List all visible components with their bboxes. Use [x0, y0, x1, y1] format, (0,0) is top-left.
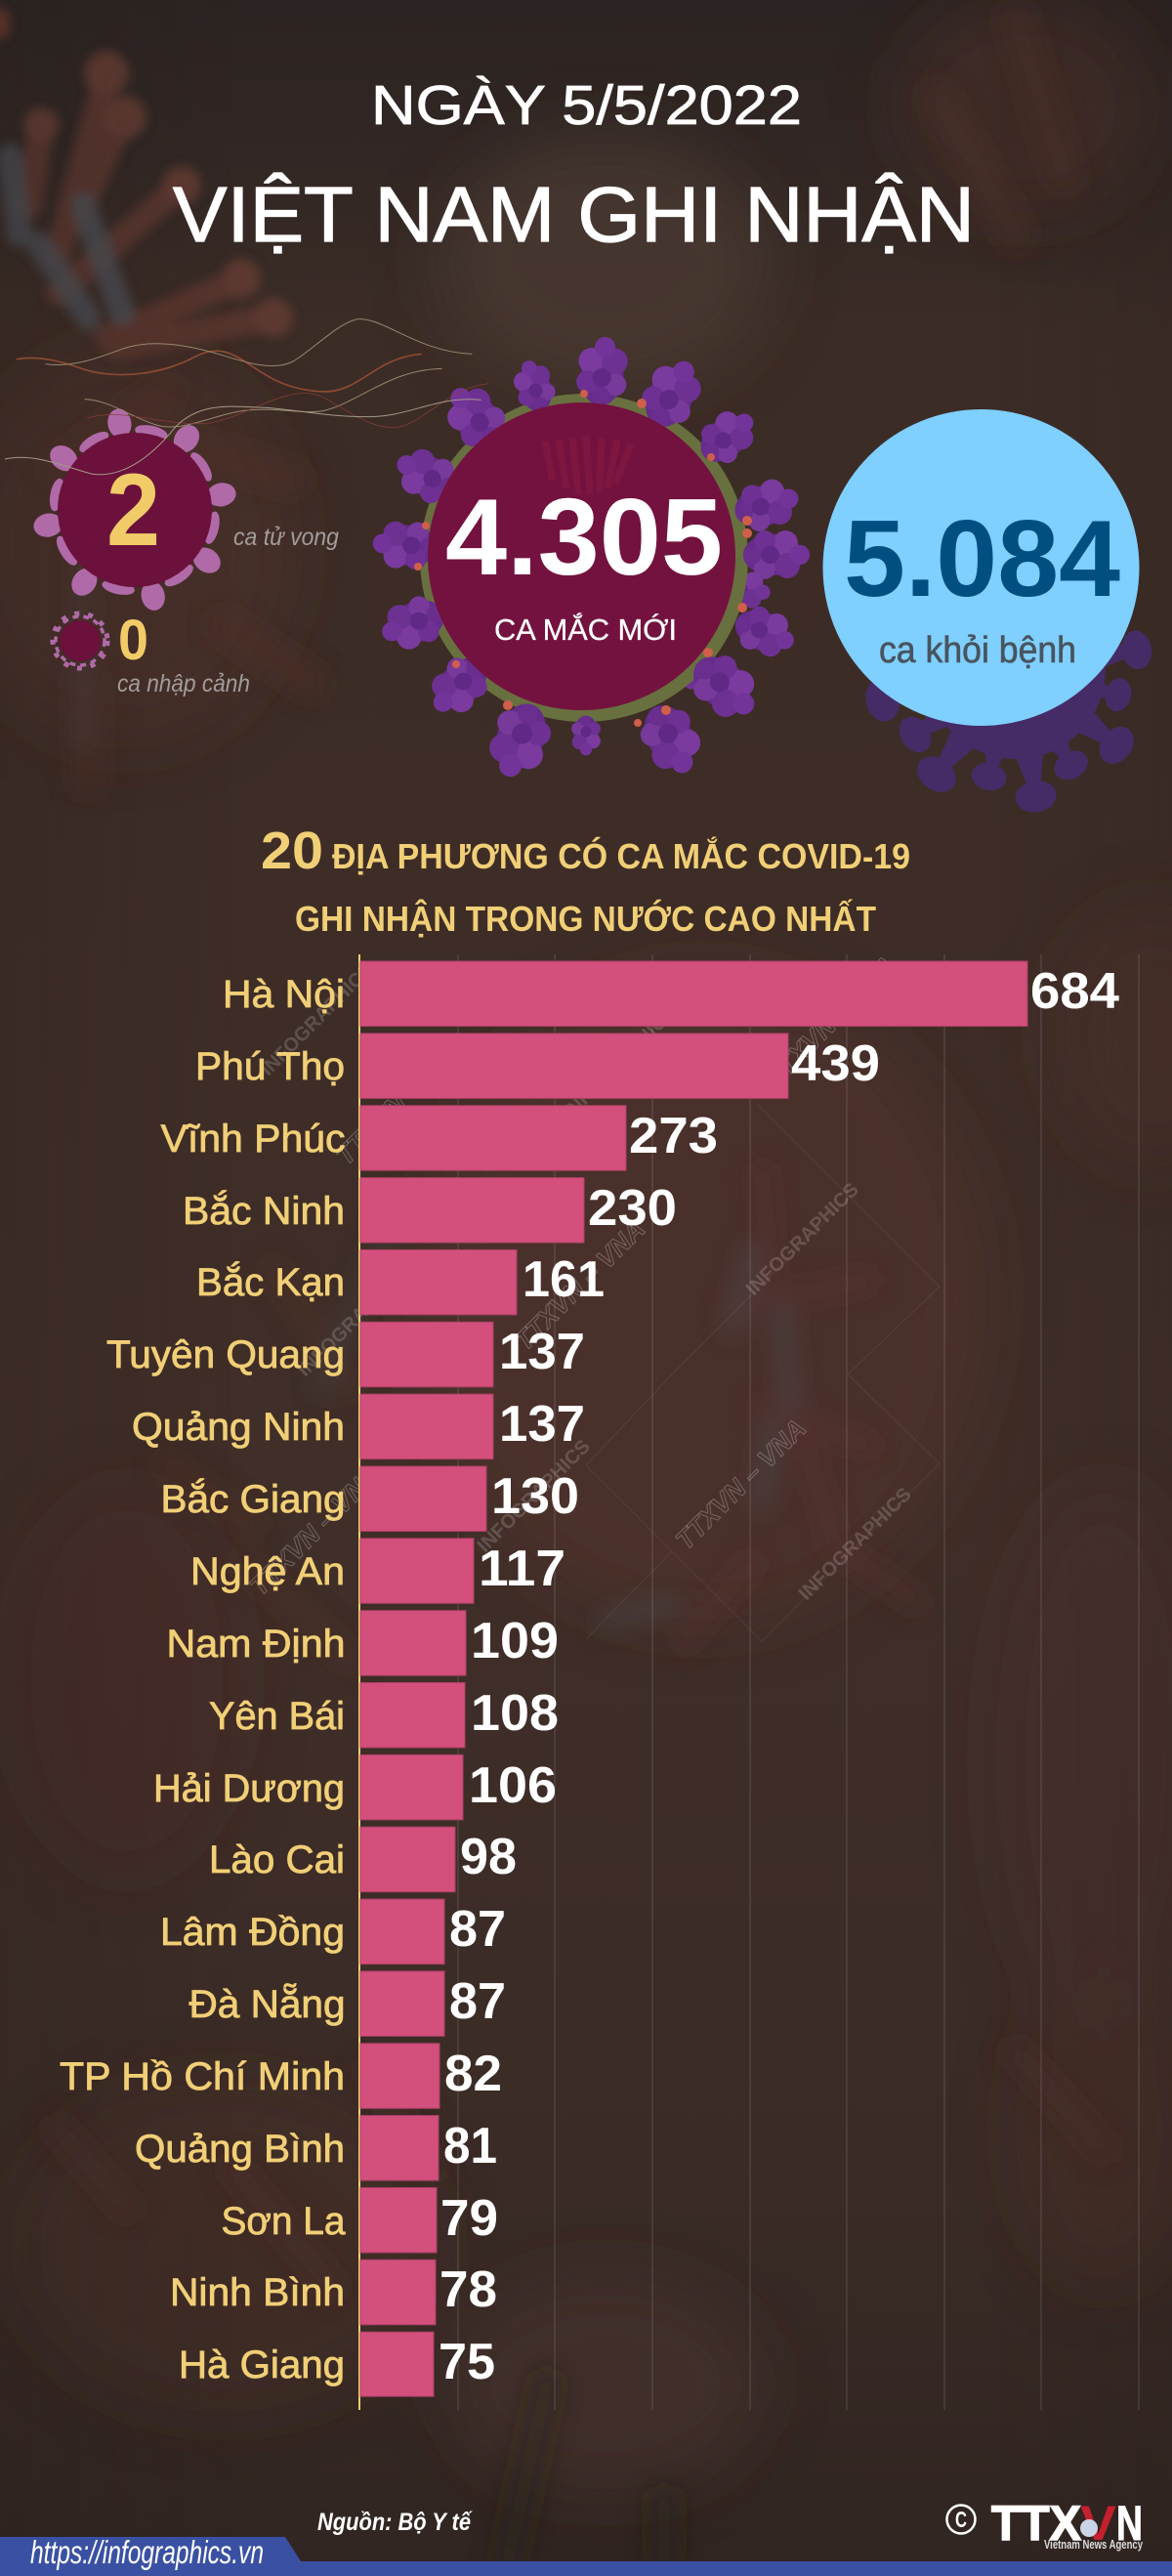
watermarks: TTXVN – VNA: [760, 950, 901, 1092]
row: Yên Bái: Yên Bái: [209, 1695, 345, 1738]
row: Hải Dương: [153, 1754, 557, 1820]
row: Lào Cai: [209, 1827, 517, 1892]
logo: TTXVN: TTX: [991, 2496, 1081, 2551]
row: Hà Nội: [223, 961, 1119, 1026]
chart heading: [261, 822, 910, 939]
row: Quảng Ninh: Quảng Ninh: [132, 1406, 345, 1449]
row: Bắc Giang: [160, 1466, 579, 1532]
row: Yên Bái: 108: [471, 1685, 559, 1742]
row: Hải Dương: Hải Dương: [153, 1767, 345, 1810]
row: Vĩnh Phúc: 273: [629, 1108, 718, 1164]
row: Hà Nội: 684: [1030, 963, 1119, 1020]
label: deaths: ca tử vong: [233, 524, 339, 551]
row: Quảng Bình: [135, 2116, 497, 2180]
row: Bắc Giang: 130: [491, 1468, 579, 1525]
row: Quảng Ninh: [132, 1394, 585, 1459]
watermarks: INFOGRAPHICS: [742, 1179, 863, 1300]
row: Sơn La: 79: [440, 2190, 498, 2247]
row: TP Hồ Chí Minh: TP Hồ Chí Minh: [60, 2055, 345, 2098]
row: TP Hồ Chí Minh: [60, 2044, 502, 2108]
watermarks: TTXVN – VNA: [330, 1029, 472, 1170]
logo: TTXVN: [947, 2496, 1144, 2552]
row: Đà Nẵng: Đà Nẵng: [189, 1982, 346, 2026]
virus: imported cases circle: [53, 609, 148, 672]
chart heading: GHI NHẬN TRONG NƯỚC CAO NHẤT: [295, 898, 876, 939]
row: Lâm Đồng: [160, 1899, 506, 1964]
watermarks: [244, 950, 940, 1641]
row: Nghệ An: [190, 1539, 565, 1603]
virus: deaths circle: [32, 407, 237, 612]
row: Vĩnh Phúc: [160, 1106, 718, 1170]
row: Bắc Kạn: [196, 1249, 605, 1315]
source: Nguồn: Bộ Y tế: [317, 2509, 473, 2536]
row: Bắc Kạn: 161: [523, 1251, 605, 1308]
virus: deaths circle: 2: [106, 453, 160, 568]
row: Tuyên Quang: Tuyên Quang: [106, 1333, 345, 1376]
watermarks: INFOGRAPHICS: [560, 1002, 681, 1123]
thin curling strands: [5, 319, 488, 475]
logo: TTXVN: N: [1116, 2496, 1143, 2551]
watermarks: TTXVN – VNA: [244, 1459, 386, 1601]
chart heading: ĐỊA PHƯƠNG CÓ CA MẮC COVID-19: [332, 835, 910, 876]
label: recovered: ca khỏi bệnh: [879, 630, 1076, 671]
row: Phú Thọ: [195, 1034, 880, 1098]
number: new cases: 4.305: [445, 477, 723, 598]
label: new cases: CA MẮC MỚI: [494, 612, 677, 647]
row: Lào Cai: 98: [460, 1829, 517, 1885]
row: Tuyên Quang: 137: [499, 1324, 585, 1380]
virus: imported cases circle: 0: [118, 609, 148, 672]
row: Bắc Giang: Bắc Giang: [160, 1477, 346, 1521]
logo: TTXVN: C: [955, 2507, 967, 2532]
footer band: [0, 2537, 1172, 2576]
row: Phú Thọ: Phú Thọ: [195, 1045, 345, 1088]
watermarks: INFOGRAPHICS: [795, 1484, 916, 1605]
row: Quảng Ninh: 137: [499, 1396, 585, 1453]
chart heading: 20: [261, 822, 323, 880]
row: Nghệ An: Nghệ An: [190, 1550, 345, 1593]
row: Phú Thọ: 439: [791, 1035, 880, 1092]
row: Hà Giang: 75: [439, 2334, 495, 2390]
footer url: https://infographics.vn: [30, 2534, 264, 2570]
virus: recovered backdrop: [861, 579, 1154, 815]
row: Đà Nẵng: 87: [449, 1973, 506, 2030]
recovered circle: [822, 409, 1139, 726]
watermarks: TTXVN – VNA: [509, 1214, 650, 1356]
row: Nam Định: 109: [471, 1613, 559, 1669]
row: Vĩnh Phúc: Vĩnh Phúc: [160, 1118, 346, 1161]
row: Hà Giang: [179, 2332, 495, 2396]
row: Yên Bái: [209, 1682, 559, 1748]
row: Quảng Bình: Quảng Bình: [135, 2128, 345, 2171]
watermarks: TTXVN – VNA: [670, 1414, 812, 1555]
row: Bắc Ninh: Bắc Ninh: [183, 1189, 345, 1233]
row: Bắc Kạn: Bắc Kạn: [196, 1260, 345, 1304]
row: Ninh Bình: [170, 2259, 497, 2325]
row: Đà Nẵng: [189, 1971, 506, 2036]
row: Ninh Bình: Ninh Bình: [170, 2271, 345, 2314]
virus: new cases: [371, 334, 810, 785]
row: Quảng Bình: 81: [443, 2118, 497, 2175]
row: TP Hồ Chí Minh: 82: [444, 2046, 502, 2102]
row: Nam Định: Nam Định: [166, 1623, 346, 1666]
label: imported cases: ca nhập cảnh: [117, 670, 250, 697]
bar chart: [60, 954, 1139, 2410]
logo: TTXVN: V: [1080, 2496, 1117, 2551]
number: recovered: 5.084: [844, 498, 1120, 619]
title: date: NGÀY 5/5/2022: [371, 74, 802, 137]
row: Ninh Bình: 78: [440, 2261, 497, 2318]
row: Nam Định: [166, 1611, 559, 1675]
row: Hải Dương: 106: [469, 1757, 557, 1814]
row: Tuyên Quang: [106, 1322, 585, 1387]
row: Lâm Đồng: 87: [449, 1901, 506, 1958]
title: main heading: VIỆT NAM GHI NHẬN: [173, 171, 975, 258]
row: Hà Nội: Hà Nội: [223, 973, 345, 1016]
row: Sơn La: Sơn La: [221, 2200, 346, 2243]
row: Lào Cai: Lào Cai: [209, 1838, 345, 1881]
watermarks: INFOGRAPHICS: [474, 1436, 595, 1557]
row: Sơn La: [221, 2188, 498, 2253]
row: Lâm Đồng: Lâm Đồng: [160, 1911, 345, 1954]
watermarks: INFOGRAPHICS: [294, 1260, 415, 1381]
row: Bắc Ninh: [183, 1178, 677, 1243]
row: Bắc Ninh: 230: [588, 1180, 677, 1237]
watermarks: INFOGRAPHICS: [257, 959, 378, 1080]
row: Hà Giang: Hà Giang: [179, 2344, 345, 2386]
row: Nghệ An: 117: [479, 1541, 565, 1597]
